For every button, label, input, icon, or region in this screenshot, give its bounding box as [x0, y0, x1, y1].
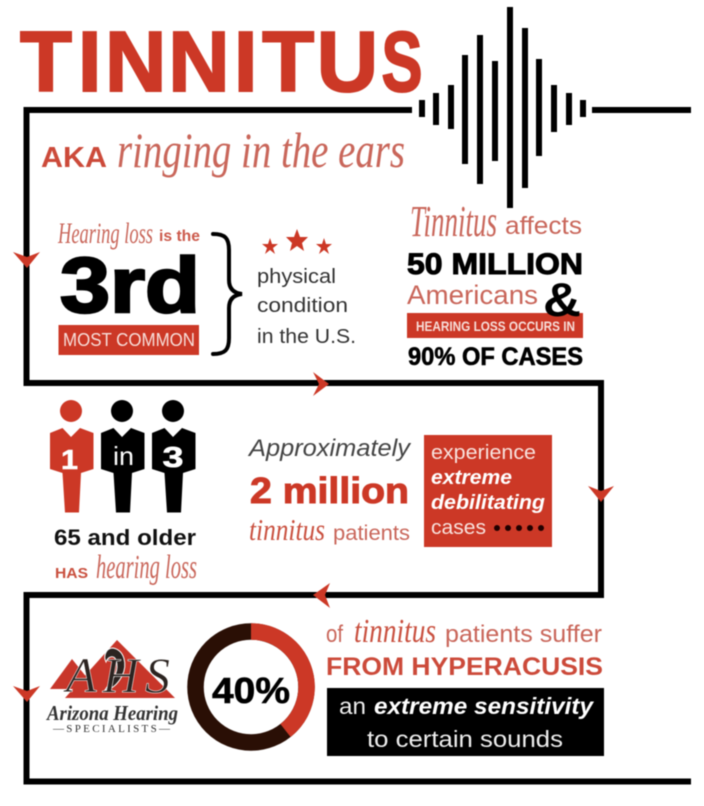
physical condition text: condition [257, 295, 348, 317]
panel: debilitating cases: cases [431, 517, 486, 539]
hearing loss stat [57, 217, 200, 355]
hyperacusis heading: of [326, 621, 343, 648]
subtitle [41, 122, 405, 178]
connecting path line [26, 110, 691, 782]
logo: Arizona Hearing Specialists: Arizona Hearing [45, 701, 178, 725]
stars [262, 229, 332, 254]
icon: three people 1 in 3: in [113, 441, 134, 471]
hearing loss stat: is the [159, 228, 200, 245]
donut chart 40% [196, 632, 307, 742]
logo: Arizona Hearing Specialists: AHS [63, 647, 170, 703]
2 million stat: tinnitus [249, 512, 325, 547]
65 and older text [54, 525, 197, 586]
tinnitus affects stat: 90% OF CASES [408, 343, 583, 371]
title: TINNITU [20, 15, 378, 110]
hearing loss stat: Hearing loss [57, 217, 153, 250]
donut chart 40%: 40% [212, 670, 290, 711]
physical condition text [257, 266, 356, 348]
logo: Arizona Hearing Specialists: —SPECIALISTS— [52, 723, 171, 735]
65 and older text: hearing loss [96, 549, 197, 586]
hyperacusis heading: tinnitus [354, 613, 436, 650]
hearing loss stat: MOST COMMON [63, 330, 195, 350]
icon: three people 1 in 3: 3 [162, 442, 184, 474]
sound wave icon [419, 7, 586, 208]
tinnitus affects stat: Tinnitus [410, 197, 497, 246]
panel: extreme sensitivity: an [339, 693, 366, 719]
65 and older text: 65 and older [54, 525, 196, 550]
tinnitus affects stat: Americans [407, 280, 538, 310]
subtitle: ringing in the ears [117, 122, 405, 178]
physical condition text: physical [257, 266, 336, 288]
65 and older text: HAS [55, 565, 88, 582]
panel: debilitating cases: extreme [431, 467, 512, 489]
panel: debilitating cases [424, 435, 552, 547]
arrows on path [13, 252, 614, 702]
icon: three people 1 in 3: 1 [61, 444, 78, 475]
tinnitus affects stat: 50 MILLION [407, 248, 583, 281]
panel: debilitating cases: debilitating [431, 492, 545, 514]
hyperacusis heading: patients suffer [445, 621, 602, 648]
2 million stat: Approximately [247, 435, 412, 462]
hyperacusis heading [326, 613, 603, 681]
panel: debilitating cases: experience [431, 442, 536, 464]
icon: three people 1 in 3 [50, 400, 196, 512]
hyperacusis heading: FROM HYPERACUSIS [326, 653, 603, 681]
physical condition text: in the U.S. [257, 326, 356, 348]
hearing loss stat: 3rd [60, 241, 200, 329]
tinnitus affects stat [407, 197, 583, 371]
2 million stat: 2 million [250, 470, 409, 511]
subtitle: AKA [41, 142, 107, 174]
panel: extreme sensitivity [327, 688, 604, 756]
panel: extreme sensitivity: extreme sensitivity [374, 693, 594, 719]
2 million stat: patients [333, 522, 410, 545]
tinnitus affects stat: & [543, 273, 581, 326]
2 million stat [247, 435, 412, 547]
title: S [382, 15, 422, 110]
brace [213, 234, 242, 354]
tinnitus affects stat: HEARING LOSS OCCURS IN [416, 318, 575, 334]
logo: Arizona Hearing Specialists [45, 640, 178, 735]
tinnitus affects stat: affects [505, 212, 582, 240]
panel: extreme sensitivity: to certain sounds [367, 726, 563, 752]
